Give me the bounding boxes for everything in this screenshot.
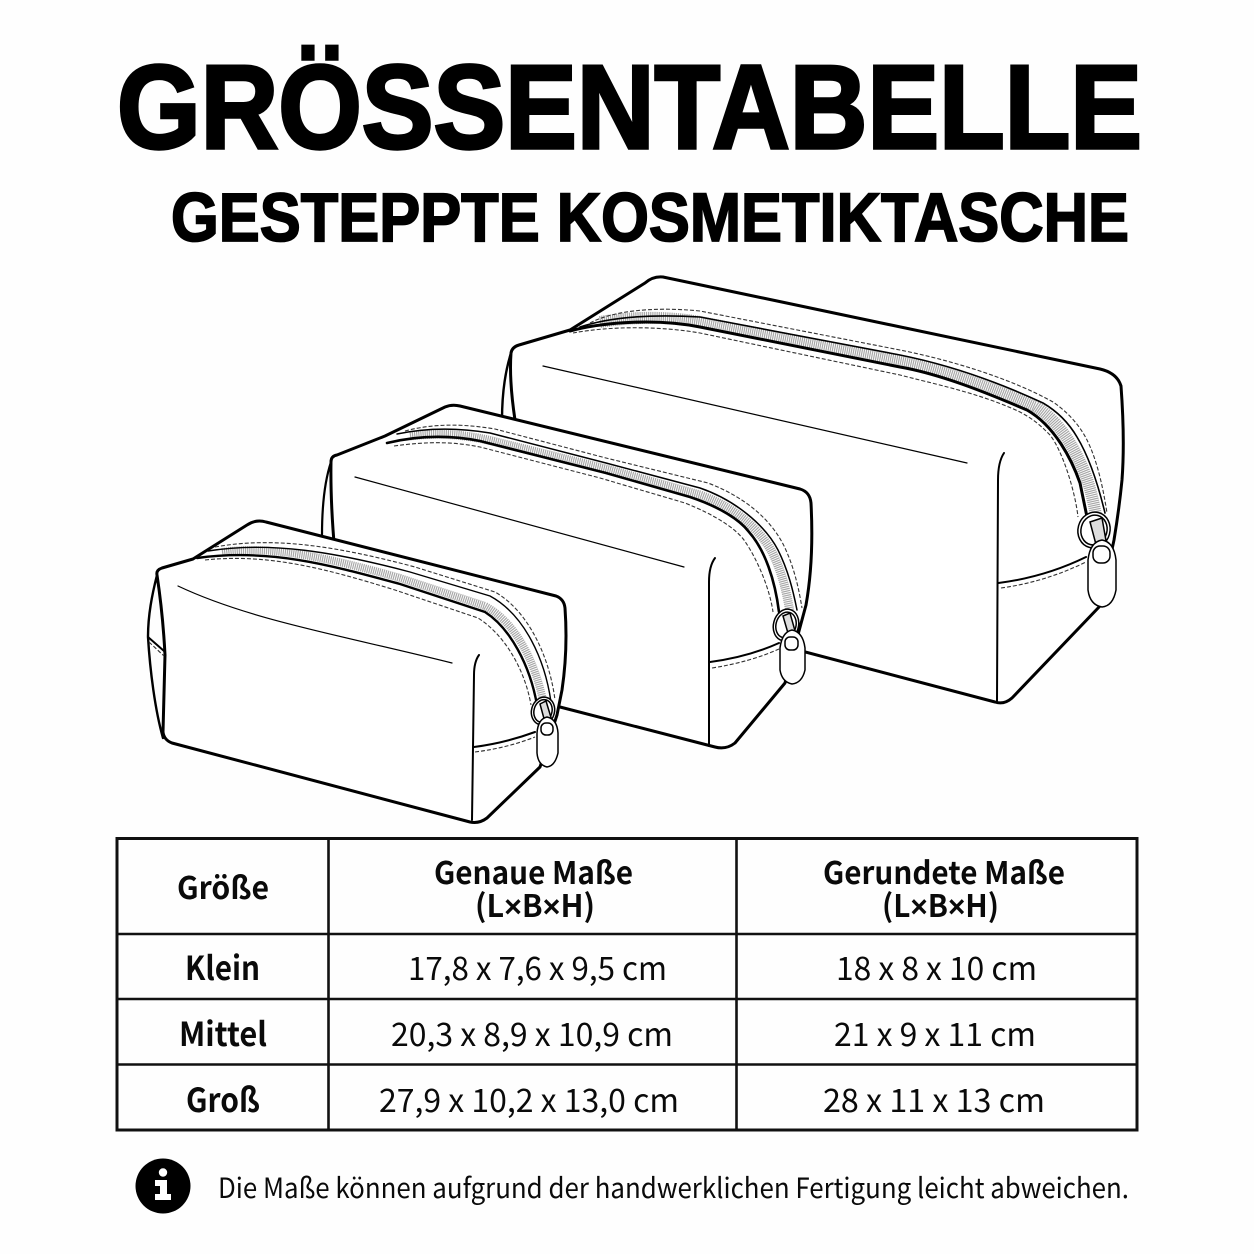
zipper pull: small — [528, 695, 558, 767]
row: Groß: 27,9 x 10,2 x 13,0 cm — [379, 1076, 679, 1122]
table grid — [117, 838, 1137, 1130]
bag: small — [148, 521, 566, 822]
header row: (L×B×H) — [882, 881, 999, 926]
row: Mittel: Mittel — [179, 1008, 267, 1056]
row: Groß: Groß — [186, 1074, 260, 1122]
row: Klein: 18 x 8 x 10 cm — [836, 944, 1037, 990]
header row: (L×B×H) — [475, 881, 595, 926]
bag: medium — [322, 405, 812, 748]
header row — [177, 848, 1065, 926]
row: Groß — [186, 1074, 1045, 1122]
row: Mittel: 21 x 9 x 11 cm — [834, 1010, 1036, 1056]
size table — [117, 838, 1137, 1130]
header row: Gerundete Maße — [823, 848, 1065, 893]
zipper pull: large — [1074, 508, 1116, 607]
row: Groß: 28 x 11 x 13 cm — [823, 1076, 1045, 1122]
subtitle: GESTEPPTE KOSMETIKTASCHE — [171, 179, 1129, 256]
row: Klein: Klein — [185, 942, 260, 990]
row: Mittel: 20,3 x 8,9 x 10,9 cm — [391, 1010, 673, 1056]
header row: Genaue Maße — [434, 848, 633, 893]
icon: info — [136, 1158, 190, 1214]
row: Klein — [185, 942, 1037, 990]
zipper pull: medium — [770, 606, 805, 684]
row: Mittel — [179, 1008, 1036, 1056]
bag: large — [502, 277, 1123, 703]
title: GRÖSSENTABELLE — [117, 41, 1142, 174]
footnote: Die Maße können aufgrund der handwerklichen Fertigung leicht abweichen. — [218, 1167, 1129, 1207]
illustration: three cosmetic bags — [148, 277, 1123, 822]
header row: Größe — [177, 863, 269, 908]
row: Klein: 17,8 x 7,6 x 9,5 cm — [408, 944, 667, 990]
